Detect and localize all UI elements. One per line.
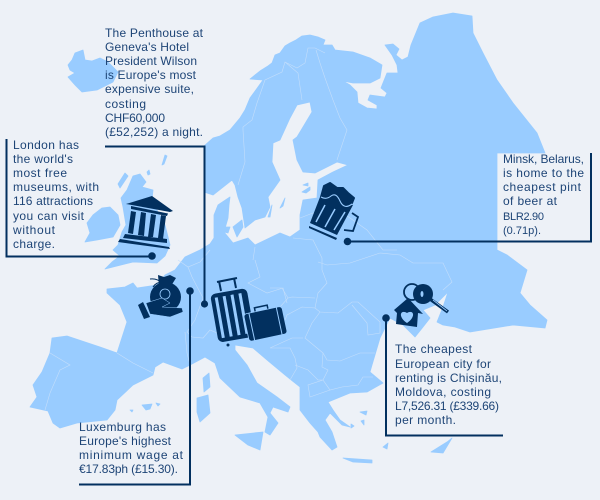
Baltic and Danish islands xyxy=(223,183,310,237)
text: Minsk beer: Minsk, Belarus, xyxy=(503,152,584,166)
text: Geneva penthouse: (£52,252) a night. xyxy=(105,125,203,139)
Aegean islands xyxy=(351,411,388,449)
text: Luxemburg wage: Europe's highest xyxy=(79,434,172,448)
Crete xyxy=(343,458,372,463)
text: Chisinau rent: Moldova, costing xyxy=(395,385,491,399)
Cyprus xyxy=(431,438,452,453)
text: London museums xyxy=(12,138,99,251)
text: London museums: you can visit xyxy=(13,209,85,223)
text: Luxemburg wage: Luxemburg has xyxy=(79,420,166,434)
icon: luggage xyxy=(210,278,287,346)
text: London museums: museums, with xyxy=(13,180,99,194)
icon: money bag in hand xyxy=(138,275,183,319)
Sicily xyxy=(235,432,263,450)
callout line: Luxemburg xyxy=(79,287,194,484)
text: London museums: the world's xyxy=(13,152,73,166)
text: Luxemburg wage: €17.83ph (£15.30). xyxy=(79,462,178,476)
text: London museums: charge. xyxy=(13,237,55,251)
Balearic islands xyxy=(130,403,160,412)
callout line: London xyxy=(6,139,156,260)
text: Geneva penthouse: President Wilson xyxy=(105,54,197,68)
Sardinia xyxy=(197,395,210,422)
Ireland xyxy=(85,207,120,242)
text: London museums: 116 attractions xyxy=(13,194,93,208)
text: Geneva penthouse xyxy=(105,26,204,139)
text: Geneva penthouse: costing xyxy=(105,97,146,111)
text: Chisinau rent: L7,526.31 (£339.66) xyxy=(395,399,499,413)
text: Minsk beer: (0.71p). xyxy=(503,225,541,237)
text: Minsk beer: is home to the xyxy=(503,166,584,180)
text: Chisinau rent xyxy=(395,342,502,427)
icon: beer mug xyxy=(309,183,358,240)
map of Europe xyxy=(30,13,547,463)
text: Minsk beer: cheapest pint xyxy=(503,180,582,194)
text: Geneva penthouse: The Penthouse at xyxy=(105,26,204,40)
text: London museums: without xyxy=(12,223,56,237)
text: Minsk beer: of beer at xyxy=(503,194,558,208)
text: Chisinau rent: The cheapest xyxy=(395,342,473,356)
Great Britain xyxy=(105,174,170,269)
icon: house keys xyxy=(394,284,448,327)
text: Chisinau rent: per month. xyxy=(395,413,456,427)
Corsica xyxy=(203,373,210,392)
text: Geneva penthouse: is Europe's most xyxy=(105,68,197,82)
text: Geneva penthouse: Geneva's Hotel xyxy=(105,40,189,54)
Iceland xyxy=(68,50,118,92)
text: Chisinau rent: European city for xyxy=(395,357,491,371)
Scottish and northern islands xyxy=(118,155,167,188)
mainland Europe xyxy=(30,13,547,450)
text: Minsk beer: BLR2.90 xyxy=(503,211,544,223)
text: Minsk beer xyxy=(503,152,584,237)
text: London museums: London has xyxy=(13,138,79,152)
text: Geneva penthouse: CHF60,000 xyxy=(105,111,165,125)
text: Luxemburg wage: minimum wage at xyxy=(79,448,184,462)
callout line: Chisinau xyxy=(382,314,503,436)
text: Geneva penthouse: expensive suite, xyxy=(105,82,194,96)
icon: museum xyxy=(118,196,173,249)
text: Chisinau rent: renting is Chișinău, xyxy=(395,371,502,385)
country borders xyxy=(45,48,452,410)
callout line: Geneva xyxy=(105,146,208,308)
text: London museums: most free xyxy=(13,166,67,180)
callout line: Minsk xyxy=(344,153,591,245)
text: Luxemburg wage xyxy=(79,420,184,476)
